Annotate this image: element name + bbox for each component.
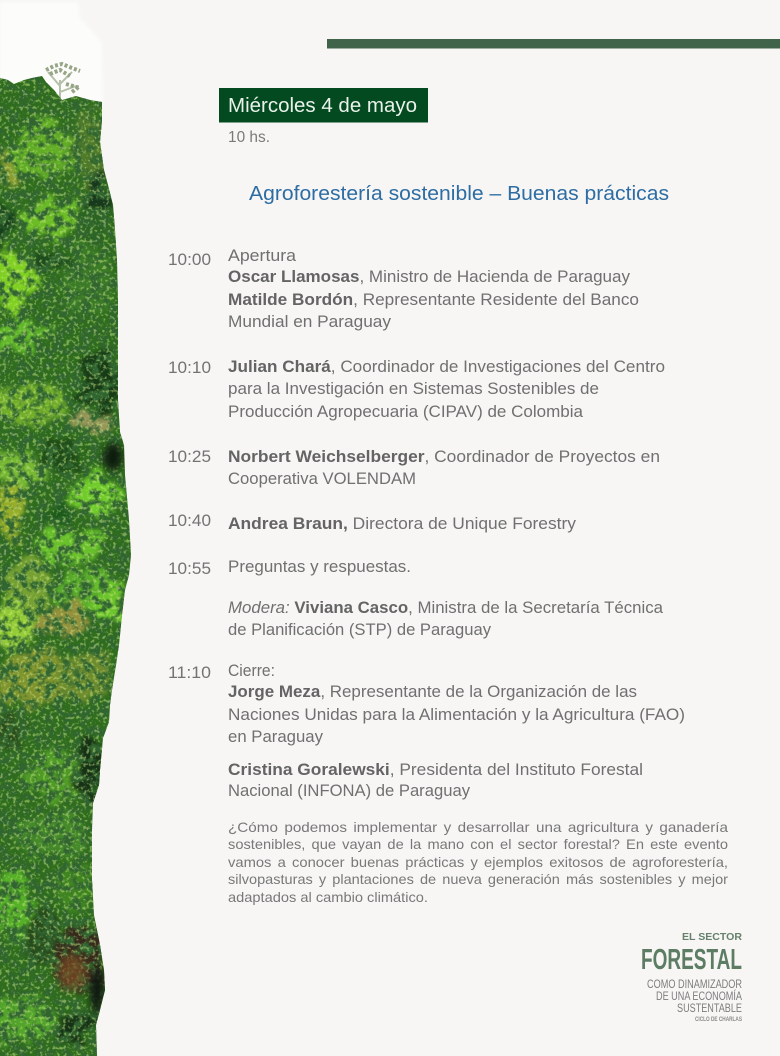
agenda 10:10 bbox=[168, 358, 665, 421]
agenda 11:10: 11:10 bbox=[168, 663, 211, 682]
tree on the skyline bbox=[46, 64, 80, 104]
logo: El sector forestal: CICLO DE CHARLAS bbox=[695, 1017, 742, 1023]
logo: El sector forestal: COMO DINAMIZADOR bbox=[647, 977, 742, 991]
agenda 10:55: Modera: Viviana Casco, Ministra de la Secretaría Técnica bbox=[228, 599, 664, 617]
agenda 10:25: Cooperativa VOLENDAM bbox=[228, 470, 416, 488]
agenda 10:40: Andrea Braun, Directora de Unique Forestry bbox=[228, 515, 577, 533]
agenda 10:00: Apertura bbox=[228, 247, 297, 265]
agenda 10:25: Norbert Weichselberger , Coordinador de Proyectos en bbox=[228, 448, 660, 466]
agenda 10:00: Mundial en Paraguay bbox=[228, 313, 392, 331]
description paragraph: vamos a conocer buenas prácticas y ejemplos exitosos de agroforestería, bbox=[228, 854, 728, 870]
agenda 11:10: en Paraguay bbox=[228, 728, 324, 746]
agenda 10:40: 10:40 bbox=[168, 511, 211, 530]
agenda 10:10: Producción Agropecuaria (CIPAV) de Colombia bbox=[228, 403, 584, 421]
agenda 10:10: 10:10 bbox=[168, 358, 211, 377]
logo: El sector forestal: DE UNA ECONOMÍA bbox=[656, 988, 742, 1003]
logo: El sector forestal: EL SECTOR bbox=[682, 931, 742, 943]
agenda 10:00: Oscar Llamosas, Ministro de Hacienda de Paraguay bbox=[228, 268, 631, 286]
agenda 10:55: Preguntas y respuestas. bbox=[228, 558, 411, 576]
photo sky bbox=[0, 2, 103, 105]
forest photo strip bbox=[0, 60, 135, 1056]
agenda 11:10 bbox=[168, 662, 685, 800]
agenda 10:10: para la Investigación en Sistemas Sostenibles de bbox=[228, 380, 599, 398]
description paragraph bbox=[228, 819, 728, 905]
agenda 11:10: Cristina Goralewski , Presidenta del Instituto Forestal bbox=[228, 761, 643, 779]
description paragraph: silvopasturas y plantaciones de nueva generación más sostenibles y mejor bbox=[228, 871, 728, 887]
agenda 11:10: Naciones Unidas para la Alimentación y la Agricultura (FAO) bbox=[228, 706, 685, 724]
description paragraph: sostenibles, que vayan de la mano con el sector forestal? En este evento bbox=[228, 836, 728, 852]
agenda 10:55 bbox=[168, 558, 664, 639]
agenda 10:10: Julian Chará, Coordinador de Investigaciones del Centro bbox=[228, 358, 665, 376]
agenda 10:00: 10:00 bbox=[168, 250, 211, 269]
top accent bar bbox=[327, 39, 780, 48]
date banner bbox=[219, 88, 428, 122]
agenda 11:10: Cierre: bbox=[228, 662, 275, 680]
agenda 10:25: 10:25 bbox=[168, 447, 211, 466]
description paragraph: adaptados al cambio climático. bbox=[228, 889, 428, 905]
logo: El sector forestal bbox=[641, 931, 742, 1023]
agenda 10:55: 10:55 bbox=[168, 559, 211, 578]
agenda 10:00: Matilde Bordón , Representante Residente del Banco bbox=[228, 291, 639, 309]
agenda 10:55: de Planificación (STP) de Paraguay bbox=[228, 621, 492, 639]
hour: 10 hs. bbox=[228, 129, 270, 146]
agenda 10:25 bbox=[168, 447, 660, 488]
logo: El sector forestal: SUSTENTABLE bbox=[677, 1001, 742, 1015]
agenda 10:40 bbox=[168, 511, 577, 533]
agenda 10:00 bbox=[168, 247, 639, 331]
session title: Agroforestería sostenible – Buenas prácticas bbox=[249, 182, 669, 205]
description paragraph: ¿Cómo podemos implementar y desarrollar una agricultura y ganadería bbox=[228, 819, 728, 835]
agenda 11:10: Nacional (INFONA) de Paraguay bbox=[228, 782, 471, 800]
date banner: Miércoles 4 de mayo bbox=[228, 94, 417, 117]
agenda 11:10: Jorge Meza, Representante de la Organización de las bbox=[228, 683, 637, 701]
